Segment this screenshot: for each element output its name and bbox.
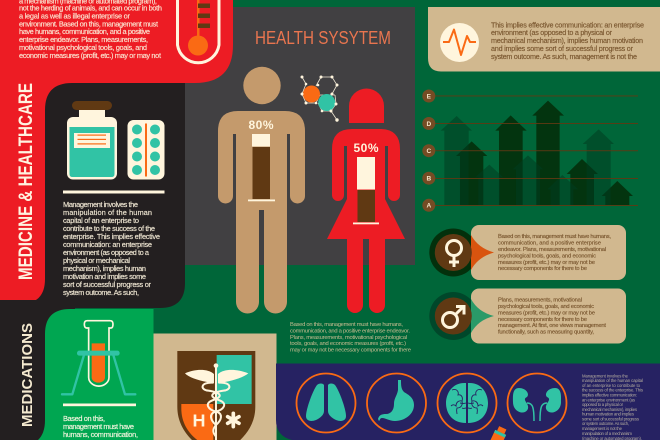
axis badges: A xyxy=(426,203,431,210)
organs text: manipulation of a mechanism xyxy=(582,431,632,436)
sidebar heading: medicine and healthcare: MEDICINE & HEALTHCARE xyxy=(16,83,37,280)
male callout xyxy=(429,288,626,344)
panel: top right callout xyxy=(428,7,660,72)
caption under figures: Based on this, management must have humans, xyxy=(290,322,403,328)
panel: organs xyxy=(276,364,660,440)
icon: heartbeat xyxy=(440,23,479,62)
medicine text: Management involves the xyxy=(63,200,138,209)
organs text: opposed to a physical or xyxy=(582,402,624,407)
male text: functionally, such as measuring quantity, xyxy=(498,330,594,336)
organs text: human motivation and implies xyxy=(582,412,634,416)
icon: female symbol xyxy=(446,240,462,267)
panel: medications xyxy=(0,304,154,440)
panel: red header and sidebar xyxy=(0,0,233,304)
callout text xyxy=(491,20,644,61)
medicine text: manipulation of the human xyxy=(63,208,152,217)
caduceus xyxy=(185,363,248,440)
intro text xyxy=(19,0,162,60)
caption under figures: may or may not be necessary components for there xyxy=(290,348,411,354)
icon: pill xyxy=(487,425,508,440)
axis badges: B xyxy=(426,176,431,182)
organs text: of an enterprise to contribute to xyxy=(582,383,641,388)
male text: necessary components for there to be xyxy=(498,317,587,323)
medicine text: capital of an enterprise to xyxy=(63,216,139,225)
icon: male symbol xyxy=(442,306,464,328)
male figure xyxy=(218,67,305,314)
callout text: and implies some sort of successful progress or xyxy=(491,44,634,53)
organs text: implies effective communication: xyxy=(582,392,637,398)
caption under figures xyxy=(290,322,411,354)
medicine text: communication: an enterprise xyxy=(63,240,152,249)
medicine text: system outcome. As such, xyxy=(63,288,139,297)
medicine text: mechanism), implies human xyxy=(63,264,146,273)
axis badges: E xyxy=(427,93,432,100)
organs text: manipulation of the human capital xyxy=(582,378,643,383)
caption under figures: Plans, measurements, motivational psychological xyxy=(290,335,407,341)
intro text: not the herding of animals, and can occur in both xyxy=(19,4,162,12)
organs text xyxy=(582,374,643,440)
callout text: system outcome. As such, management is not the xyxy=(491,52,637,61)
female figure: 50% xyxy=(354,141,379,155)
axis badges xyxy=(422,90,435,212)
panel: black medicine xyxy=(0,70,185,308)
organs text: some sort of successful progress xyxy=(582,416,639,422)
medicine bottle icon xyxy=(67,101,117,180)
icon: stomach xyxy=(367,374,426,432)
pill blister icon xyxy=(128,120,164,180)
medications text: Based on this, xyxy=(63,414,105,423)
female callout xyxy=(429,225,626,280)
icon: brain xyxy=(438,374,496,432)
panel: shield xyxy=(154,334,276,440)
sidebar heading: medications: MEDICATIONS xyxy=(19,323,36,427)
medicine text: contribute to the success of the xyxy=(63,224,155,233)
medicine text: enterprise. This implies effective xyxy=(63,232,160,241)
organs text: management is not the xyxy=(582,426,623,431)
organs text: the success of the enterprise. This xyxy=(582,388,643,392)
male text: psychological tools, goals, and economic xyxy=(498,304,594,310)
medicine text xyxy=(63,200,160,297)
intro text: economic measures (profit, etc.) may or may not xyxy=(19,51,161,60)
female text xyxy=(498,234,611,272)
intro text: enterprise endeavor. Plans, measurements, xyxy=(19,35,148,44)
female figure xyxy=(327,88,405,313)
sidebar strip xyxy=(0,304,45,440)
intro text: motivational psychological tools, goals, and xyxy=(19,43,147,52)
female text: psychological tools, goals, and economic xyxy=(498,253,596,259)
male figure: 80% xyxy=(248,118,274,132)
medicine text: physical or mechanical xyxy=(63,256,130,265)
callout text: mechanical mechanism), implies human motivation xyxy=(491,36,643,45)
intro text: have humans, communication, and a positive xyxy=(19,27,150,36)
caption under figures: communication, and a positive enterprise endeavor. xyxy=(290,328,410,334)
male text: Plans, measurements, motivational xyxy=(498,298,582,304)
organs text: or system outcome. As such, xyxy=(582,421,629,426)
axis badges: C xyxy=(426,148,431,155)
test tube icon xyxy=(62,321,135,394)
medications text: humans, communication, xyxy=(63,430,138,439)
male text xyxy=(498,298,606,336)
female text: necessary components for there to be xyxy=(498,266,587,272)
molecule icon xyxy=(300,76,339,122)
axis badges: D xyxy=(426,121,431,128)
female text: communication, and a positive enterprise xyxy=(498,240,601,246)
intro text: a legal as well as illegal enterprise or xyxy=(19,12,131,20)
thermometer icon xyxy=(178,0,219,63)
organs text: Management involves the xyxy=(582,374,629,378)
icon: kidneys xyxy=(508,374,566,432)
title: HEALTH SYSYTEM xyxy=(255,28,391,48)
organs text: an enterprise environment (as xyxy=(582,398,635,402)
medications text: management must have xyxy=(63,422,134,431)
medicine text: sort of successful progress or xyxy=(63,280,152,289)
caption under figures: tools, goals, and economic measures (profit, etc.) xyxy=(290,341,406,347)
female text: endeavor. Plans, measurements, motivational xyxy=(498,247,606,253)
callout text: environment (as opposed to a physical or xyxy=(491,28,613,37)
panel: health system xyxy=(180,7,415,314)
icon: lungs xyxy=(296,374,356,432)
female text: Based on this, management must have humans, xyxy=(498,234,611,240)
medicine text: environment (as opposed to a xyxy=(63,248,150,257)
shield emblem: H xyxy=(192,410,205,430)
organs text: mechanical mechanism), implies xyxy=(582,407,637,412)
intro text: environment. Based on this, management must xyxy=(19,20,158,28)
male text: management. At first, one views management xyxy=(498,323,606,329)
female text: measures (profit, etc.) may or may not be xyxy=(498,260,595,266)
medicine text: motivation and implies some xyxy=(63,272,146,281)
medications text xyxy=(63,414,138,439)
male text: measures (profit, etc.) may or may not be xyxy=(498,310,595,316)
callout text: This implies effective communication: an enterprise xyxy=(491,20,644,30)
chart: arrows xyxy=(422,90,638,212)
